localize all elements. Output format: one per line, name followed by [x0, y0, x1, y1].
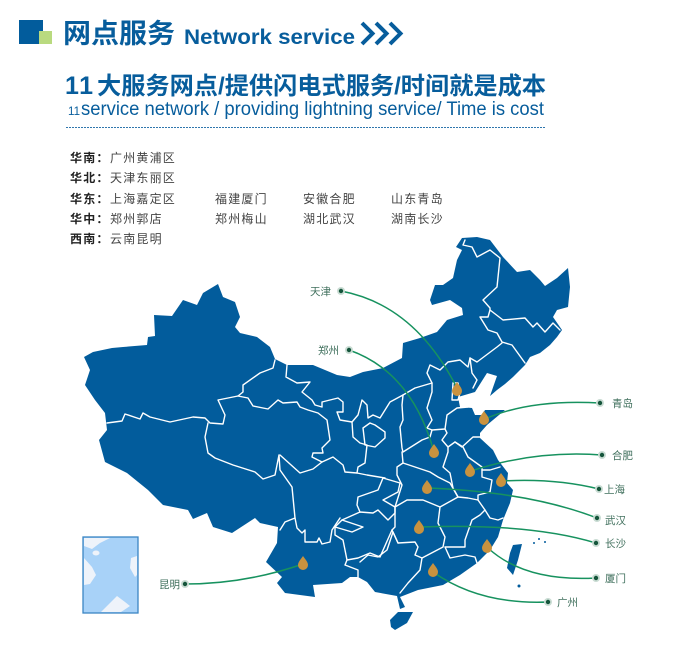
- map of China: [84, 237, 570, 630]
- list row: Central China: 华中：: [70, 211, 110, 226]
- province borders: [107, 240, 560, 593]
- list row: Southwest China: 西南：: [70, 232, 110, 246]
- leader line: 上海: 上海: [604, 483, 625, 496]
- list row: Central China: 郑州梅山: [215, 211, 268, 226]
- list row: East China: 华东：: [70, 191, 110, 206]
- leader line: 合肥: 合肥: [612, 449, 633, 462]
- list row: South China: 华南：: [70, 150, 110, 165]
- list row: East China: 安徽合肥: [303, 191, 356, 206]
- leader line: 广州: [428, 563, 578, 609]
- header: [19, 19, 400, 49]
- leader line: 上海: [496, 473, 625, 496]
- leader line: 广州: 广州: [557, 597, 578, 609]
- list row: Southwest China: 云南昆明: [110, 231, 163, 246]
- list row: North China: 天津东丽区: [110, 171, 176, 185]
- English subtitle: service network / providing lightning service/ Time is cost: [81, 98, 545, 120]
- list row: Central China: 湖南长沙: [391, 211, 444, 226]
- leader line: 厦门: 厦门: [605, 572, 626, 585]
- inset land: [84, 538, 137, 612]
- service network list: [70, 150, 444, 246]
- heading: English title: Network service: [184, 26, 355, 49]
- leader line: 武汉: [422, 480, 626, 527]
- leader line: 昆明: [159, 556, 308, 591]
- icon: triple chevron arrow: [362, 23, 400, 44]
- leader line: 厦门: [482, 539, 626, 585]
- icon: header squares: [19, 20, 52, 44]
- leader line: 合肥: [465, 449, 633, 477]
- list row: North China: 华北：: [70, 170, 110, 185]
- list row: South China: 广州黄浦区: [110, 151, 176, 165]
- list row: North China: [70, 170, 176, 185]
- subtitle block: [65, 72, 546, 128]
- leader line: 青岛: 青岛: [612, 397, 633, 410]
- inset frame and sea: [83, 537, 138, 613]
- list row: East China: 上海嘉定区: [110, 191, 176, 206]
- leader line: 天津: [310, 286, 462, 396]
- list row: Southwest China: [70, 231, 163, 246]
- leader line: 长沙: 长沙: [605, 538, 626, 550]
- leader line: 武汉: 武汉: [605, 514, 626, 527]
- inset: South China Sea: [83, 537, 138, 613]
- leader line: 郑州: [318, 344, 439, 458]
- heading: Chinese title: 网点服务: [63, 19, 175, 49]
- leader line: 天津: 天津: [310, 286, 331, 298]
- list row: East China: 福建厦门: [215, 191, 268, 206]
- leader line: 昆明: 昆明: [159, 579, 180, 591]
- list row: Central China: 湖北武汉: [303, 211, 356, 226]
- Hainan island: [390, 612, 413, 630]
- leader line: 青岛: [479, 397, 633, 425]
- mainland silhouette: [84, 237, 570, 609]
- English subtitle: 11: [68, 104, 80, 118]
- leader line: 长沙: [414, 520, 626, 550]
- list row: Central China: [70, 211, 444, 226]
- list row: Central China: 郑州郭店: [110, 211, 163, 226]
- leader line: 郑州: 郑州: [318, 344, 339, 357]
- Taiwan island: [507, 544, 522, 575]
- list row: South China: [70, 150, 176, 165]
- list row: East China: [70, 191, 444, 206]
- Chinese subtitle: 大服务网点/提供闪电式服务/时间就是成本: [97, 73, 546, 100]
- list row: East China: 山东青岛: [391, 191, 444, 206]
- Chinese subtitle: 11: [65, 72, 93, 100]
- small islands: [518, 538, 546, 588]
